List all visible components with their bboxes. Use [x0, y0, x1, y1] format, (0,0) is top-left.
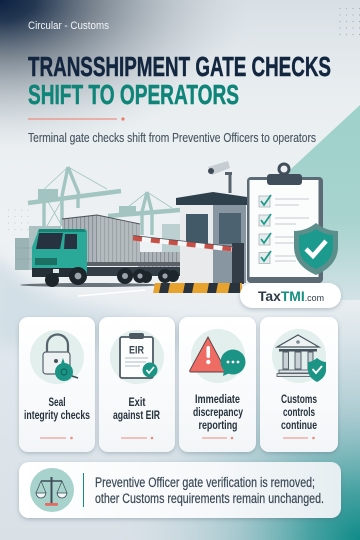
divider	[83, 473, 84, 507]
title: SHIFT TO OPERATORS	[28, 79, 239, 110]
icon: EIR clipboard: EIR	[129, 344, 144, 356]
icon: padlock and seal	[30, 330, 84, 384]
card label	[113, 397, 161, 422]
stacked containers	[15, 224, 180, 270]
panel: customs controls continue	[260, 317, 338, 452]
title accent rule	[28, 117, 125, 121]
title	[28, 51, 331, 110]
category label: Circular - Customs	[28, 20, 109, 32]
gate booth	[176, 192, 247, 284]
card label: Immediate	[195, 394, 240, 406]
card label: Customs	[281, 394, 317, 406]
barrier arm	[133, 236, 232, 249]
card label: Exit	[128, 397, 146, 409]
hazard kerb	[153, 283, 242, 293]
port cranes	[28, 167, 180, 235]
panel: seal integrity checks	[19, 317, 95, 452]
panel: exit against EIR	[99, 317, 175, 452]
card label: integrity checks	[24, 410, 90, 422]
card accent	[121, 437, 153, 439]
card label	[281, 394, 317, 432]
logo badge	[240, 283, 341, 308]
logo badge: TaxTMI.com	[258, 288, 324, 304]
icon: warning and speech bubble	[190, 329, 246, 383]
icon: scales of justice	[30, 468, 74, 512]
card accent	[283, 437, 315, 439]
card label	[193, 394, 243, 432]
security shield	[294, 223, 338, 275]
security camera	[208, 161, 232, 193]
card label: reporting	[198, 420, 238, 432]
conclusion text	[95, 475, 324, 506]
hero illustration	[15, 161, 338, 296]
card label: against EIR	[113, 410, 161, 422]
card label	[24, 397, 90, 422]
card accent	[202, 437, 233, 439]
card label: discrepancy	[193, 407, 243, 419]
card label: controls	[283, 407, 315, 419]
icon: customs building and shield	[272, 329, 326, 383]
card label: continue	[281, 420, 317, 432]
truck	[20, 215, 181, 287]
panel: conclusion note	[19, 462, 341, 518]
card accent	[40, 437, 73, 439]
road marking	[78, 290, 145, 296]
card label: Seal	[48, 397, 66, 409]
panel: immediate discrepancy reporting	[179, 317, 256, 452]
clipboard checklist	[247, 164, 323, 283]
